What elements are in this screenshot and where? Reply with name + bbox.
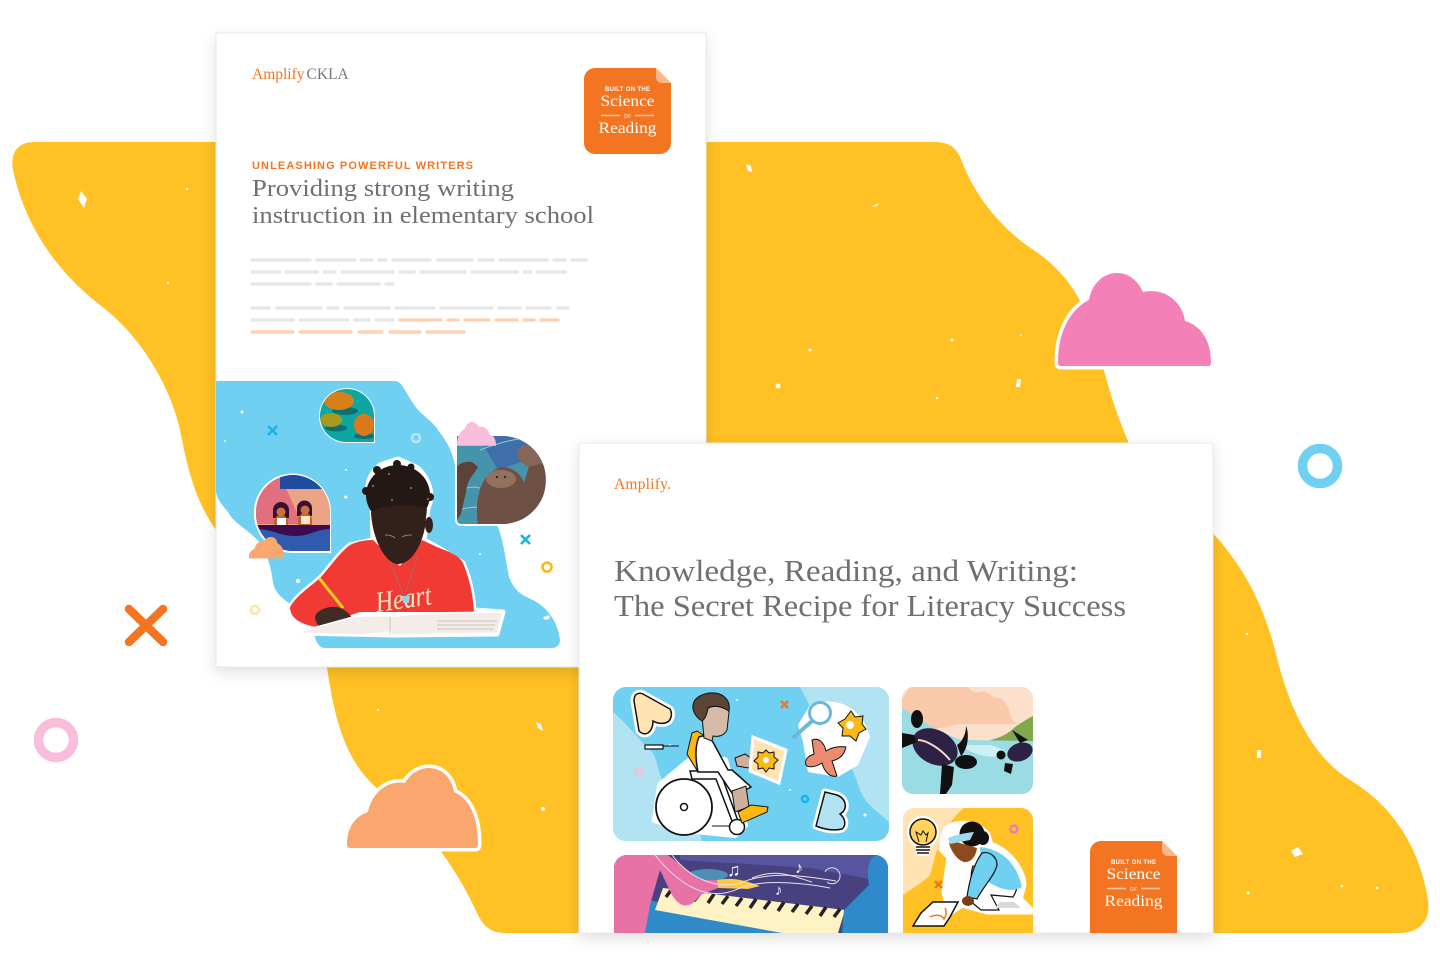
icon: small pink cloud bbox=[457, 422, 496, 446]
placeholder text lines bbox=[252, 260, 586, 332]
piano side bbox=[842, 855, 888, 933]
keyboard bbox=[655, 888, 845, 933]
photo: cocoa pods bbox=[318, 388, 376, 444]
blob speckles bbox=[224, 410, 550, 620]
icon: blue cross right bbox=[521, 535, 530, 544]
badge: science of reading lower: Reading bbox=[1104, 893, 1162, 910]
icon: pink ring bbox=[38, 722, 74, 758]
letter shape B bbox=[816, 792, 845, 830]
icon: yellow ring bbox=[542, 562, 552, 572]
heading bbox=[252, 175, 594, 229]
sweater bbox=[290, 540, 474, 627]
badge: science of reading: Reading bbox=[598, 120, 656, 137]
icon: blue ring bbox=[1302, 448, 1338, 484]
small marks bbox=[781, 701, 788, 708]
necklace bbox=[389, 555, 418, 597]
heading: Providing strong writing bbox=[252, 175, 514, 202]
illustration: sea turtles bbox=[902, 687, 1035, 794]
photo: illustrated figures bbox=[254, 474, 332, 553]
sweater lettering: Heart bbox=[373, 579, 434, 619]
logo: Amplify: Amplify. bbox=[614, 476, 671, 493]
icon: pink cloud bbox=[1058, 273, 1211, 366]
heading: instruction in elementary school bbox=[252, 202, 594, 229]
panel: CKLA document bbox=[216, 33, 706, 667]
badge: science of reading lower: OF bbox=[1130, 887, 1138, 893]
pencil bbox=[319, 578, 343, 608]
icon: peach cloud bbox=[347, 768, 478, 848]
background speckles bbox=[78, 164, 1378, 894]
bulb bbox=[910, 819, 936, 845]
icon: orange cross bbox=[129, 609, 163, 642]
open book bbox=[295, 612, 503, 635]
icon: blue cross bbox=[268, 426, 277, 435]
logo: Amplify CKLA: AmplifyCKLA bbox=[252, 66, 350, 83]
badge: science of reading lower: Science bbox=[1106, 866, 1160, 883]
illustration: piano: ♫ bbox=[727, 860, 740, 880]
photo: sea lions bbox=[455, 434, 548, 526]
figure bbox=[942, 824, 1031, 912]
panel: Knowledge document bbox=[579, 443, 1213, 933]
wheels and chair bbox=[655, 760, 745, 835]
face bbox=[371, 506, 427, 564]
blue blob illustration bbox=[216, 381, 560, 648]
heading bbox=[614, 553, 1126, 623]
white cut-out outline bbox=[290, 459, 503, 635]
hair bbox=[366, 465, 430, 525]
badge: science of reading: Science bbox=[600, 93, 654, 110]
illustration: piano: ♪ bbox=[775, 883, 782, 899]
illustration: piano: ♪ bbox=[795, 860, 803, 877]
icon: pale ring bbox=[412, 434, 420, 442]
badge: science of reading lower bbox=[1090, 841, 1177, 933]
badge: science of reading: BUILT ON THE bbox=[605, 87, 650, 93]
icon: cream ring bbox=[251, 606, 259, 614]
sleeve bbox=[614, 855, 720, 933]
heading: Knowledge, Reading, and Writing: bbox=[614, 553, 1078, 588]
badge: science of reading lower: BUILT ON THE bbox=[1111, 860, 1156, 866]
photo: child writing bbox=[290, 459, 503, 635]
letter shape A bbox=[634, 693, 671, 734]
icon: small peach cloud bbox=[249, 537, 284, 558]
book bbox=[750, 737, 786, 783]
heading: The Secret Recipe for Literacy Success bbox=[614, 588, 1126, 623]
illustration: wheelchair reader bbox=[613, 687, 889, 841]
magnifier and butterfly bbox=[798, 702, 870, 777]
paper bbox=[913, 902, 958, 926]
badge: science of reading bbox=[584, 68, 671, 154]
hand bbox=[315, 607, 356, 631]
handle bbox=[645, 745, 663, 749]
child figure bbox=[686, 730, 704, 772]
badge: science of reading: OF bbox=[624, 114, 632, 120]
illustration: piano bbox=[614, 855, 888, 933]
illustration: child with light bulb bbox=[903, 808, 1033, 933]
eyebrow: UNLEASHING POWERFUL WRITERS bbox=[252, 160, 473, 172]
